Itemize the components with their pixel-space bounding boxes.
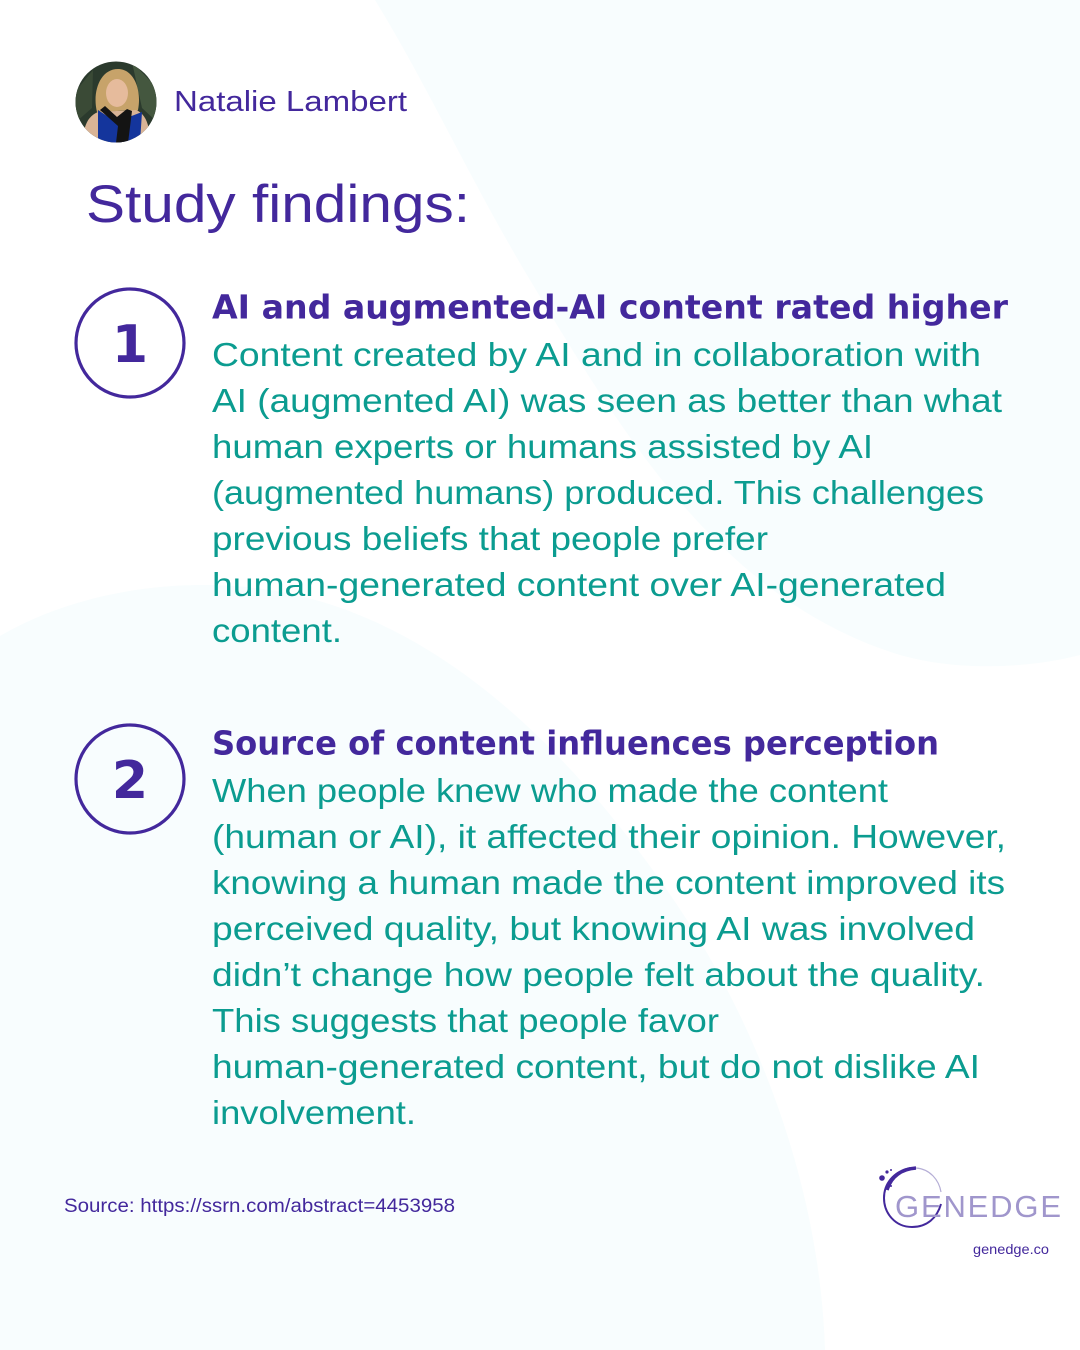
number badge 1: 1 — [112, 315, 148, 375]
finding 2 body text: knowing a human made the content improved its — [212, 864, 1005, 901]
finding 1 body text: human-generated content over AI-generated — [212, 566, 946, 603]
finding 2 body text — [212, 772, 1006, 1131]
finding 1 body text: human experts or humans assisted by AI — [212, 428, 873, 465]
source citation: Source: https://ssrn.com/abstract=4453958 — [64, 1196, 455, 1217]
finding 2 body text: When people knew who made the content — [212, 772, 888, 809]
title: Study findings: — [86, 175, 470, 234]
finding 2 — [212, 724, 1006, 1131]
logo wordmark: GENEDGE — [895, 1189, 1061, 1224]
number badge 2: 2 — [112, 751, 148, 811]
finding 1 body text: content. — [212, 612, 342, 649]
finding 2 body text: (human or AI), it affected their opinion. However, — [212, 818, 1006, 855]
number badge 1 — [76, 289, 184, 397]
finding 1 — [212, 288, 1009, 649]
logo website: genedge.co — [973, 1242, 1049, 1257]
finding 1 heading: AI and augmented-AI content rated higher — [212, 288, 1009, 326]
finding 2 body text: didn’t change how people felt about the quality. — [212, 956, 985, 993]
finding 2 body text: This suggests that people favor — [212, 1002, 719, 1039]
finding 2 body text: human-generated content, but do not dislike AI — [212, 1048, 980, 1085]
logo ring — [884, 1168, 941, 1227]
number badge 2 — [76, 725, 184, 833]
finding 1 body text: AI (augmented AI) was seen as better than what — [212, 382, 1002, 419]
finding 1 body text — [212, 336, 1002, 649]
author name: Natalie Lambert — [174, 86, 407, 118]
finding 1 body text: (augmented humans) produced. This challenges — [212, 474, 984, 511]
logo: Genedge — [879, 1168, 1061, 1227]
finding 2 body text: involvement. — [212, 1094, 416, 1131]
logo dots — [879, 1169, 892, 1187]
finding 2 body text: perceived quality, but knowing AI was involved — [212, 910, 975, 947]
finding 1 body text: Content created by AI and in collaboration with — [212, 336, 981, 373]
finding 1 body text: previous beliefs that people prefer — [212, 520, 768, 557]
finding 2 heading: Source of content influences perception — [212, 724, 939, 762]
author avatar photo — [75, 61, 157, 143]
